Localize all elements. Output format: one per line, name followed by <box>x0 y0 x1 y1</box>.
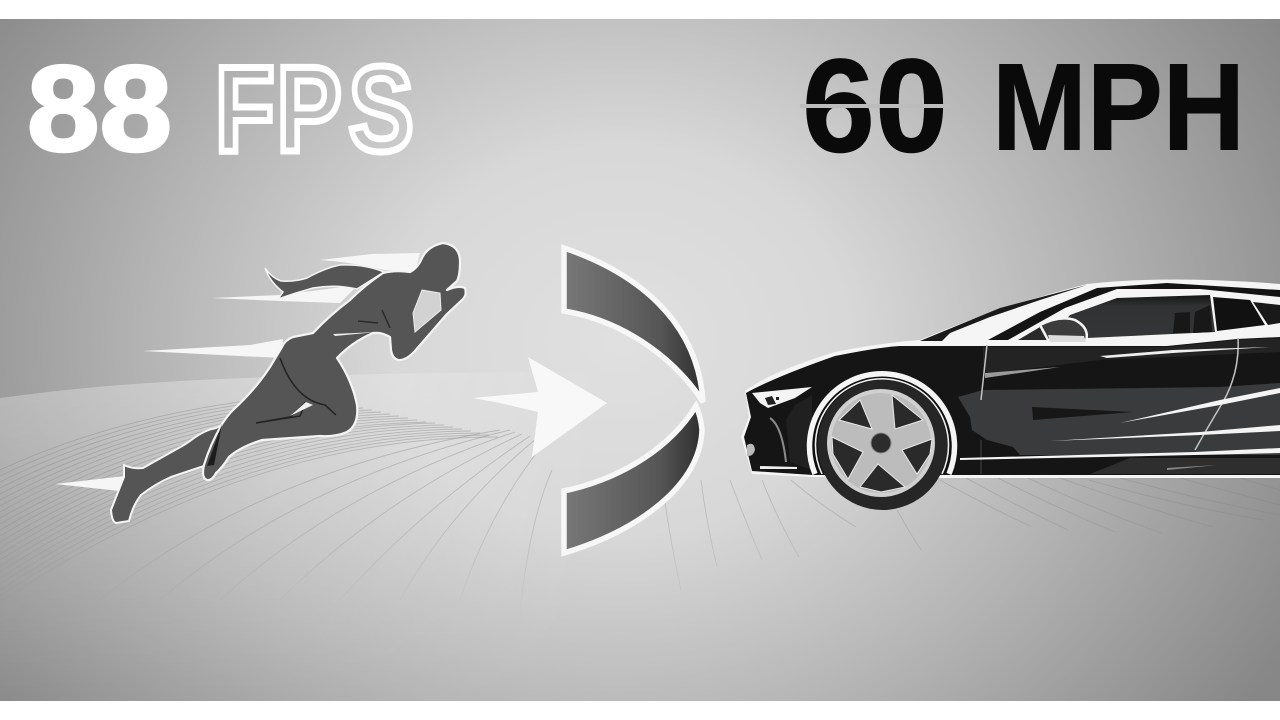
rear side window <box>1213 297 1265 331</box>
icon: sprinting runner <box>111 243 466 523</box>
back arm <box>265 265 384 299</box>
wheel arch <box>810 374 954 474</box>
chevron lower band <box>564 406 702 553</box>
side window <box>1050 295 1215 338</box>
wheel <box>818 380 948 510</box>
heading: 60 MPH <box>800 32 1245 180</box>
bottom white band <box>0 701 1280 720</box>
white roof silhouette <box>741 280 1280 478</box>
ground grid lines <box>0 395 1280 610</box>
heading: 60 MPH: 60 <box>802 32 948 180</box>
dark body <box>744 337 1280 475</box>
front bumper details <box>760 466 797 469</box>
windshield dark streak <box>920 285 1087 341</box>
arm gap <box>413 290 441 332</box>
side mirror <box>1018 327 1047 340</box>
heading: 88 FPS: FPS <box>215 42 414 178</box>
body <box>203 243 466 480</box>
lower body tone <box>958 383 1280 455</box>
arrow <box>473 357 607 457</box>
rim <box>827 389 935 497</box>
heading: 88 FPS: 88 <box>27 40 172 176</box>
icon: chevron bracket <box>564 248 703 553</box>
top white band <box>0 0 1280 19</box>
spoke windows <box>832 395 932 492</box>
chevron upper band <box>564 248 703 402</box>
hub <box>871 433 891 453</box>
headlight <box>752 387 812 408</box>
icon: sports car <box>741 280 1280 510</box>
seat headrests <box>1173 305 1212 333</box>
upper door tone <box>983 338 1280 372</box>
heading: 60 MPH: MPH <box>992 40 1245 176</box>
heading: 88 FPS <box>27 40 414 178</box>
tyre <box>818 380 948 510</box>
roof dark band <box>988 283 1280 340</box>
speed streaks behind runner <box>55 253 420 491</box>
body creases <box>256 358 336 423</box>
door lines <box>981 338 1238 450</box>
rear leg <box>111 424 224 523</box>
body streaks <box>1100 347 1270 358</box>
